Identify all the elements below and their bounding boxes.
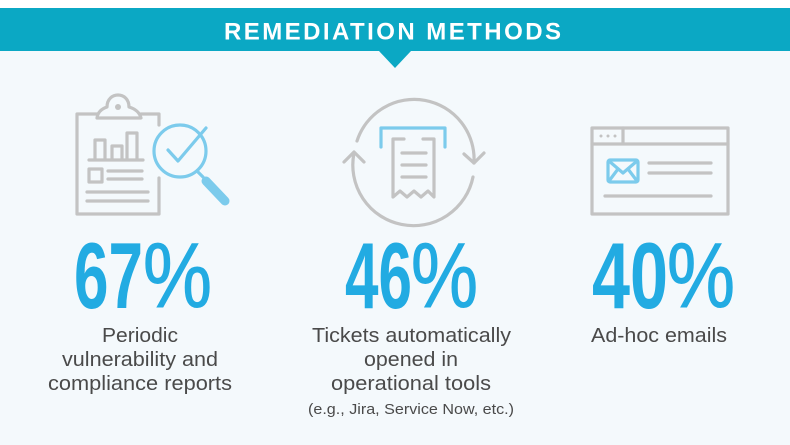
stat: 40%: % bbox=[667, 225, 735, 327]
caption: ad-hoc emails: Ad-hoc emails bbox=[591, 325, 727, 347]
title: REMEDIATION METHODS bbox=[224, 18, 561, 46]
header banner bbox=[0, 8, 790, 68]
caption: periodic reports: compliance reports bbox=[48, 373, 232, 395]
caption: tickets: operational tools bbox=[331, 373, 491, 395]
stat: 67%: 67 bbox=[74, 223, 143, 328]
stat: 67%: % bbox=[143, 225, 212, 327]
caption: tickets: opened in bbox=[364, 349, 458, 371]
caption: periodic reports: Periodic bbox=[102, 325, 178, 347]
icon: clipboard with magnifier bbox=[77, 95, 225, 214]
stat: 46%: % bbox=[411, 225, 478, 327]
stat: 46%: 46 bbox=[345, 223, 412, 328]
caption: tickets: Tickets automatically bbox=[312, 325, 511, 347]
stat: 40%: 40 bbox=[592, 223, 668, 328]
caption: tickets bbox=[308, 325, 514, 418]
icon: ticket cycle bbox=[344, 99, 484, 226]
caption: periodic reports bbox=[48, 325, 232, 395]
caption: periodic reports: vulnerability and bbox=[62, 349, 218, 371]
caption: tickets: (e.g., Jira, Service Now, etc.) bbox=[308, 401, 514, 418]
icon: browser with envelope bbox=[592, 128, 728, 214]
